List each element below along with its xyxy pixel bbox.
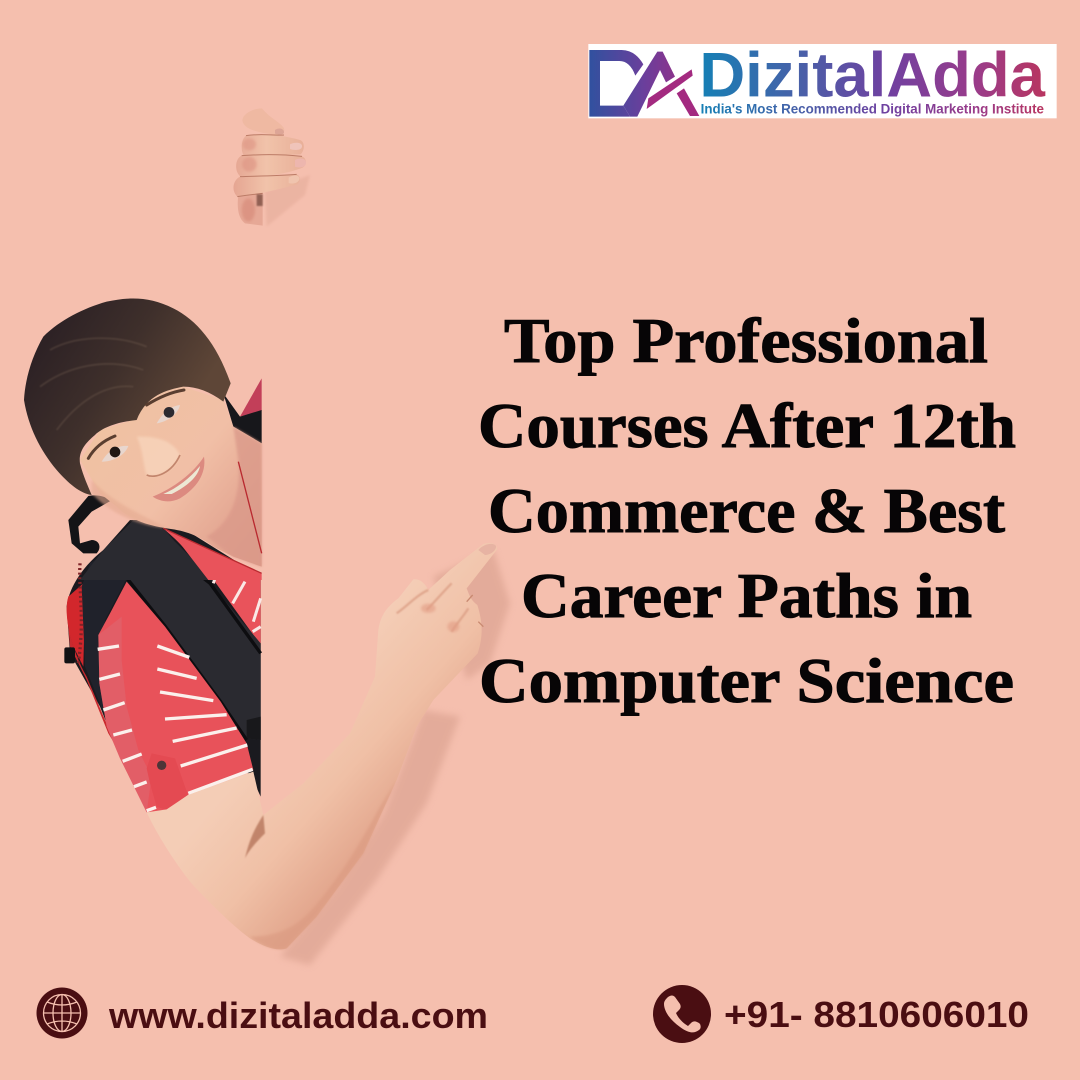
logo: DizitalAdda: DizitalAdda <box>699 41 1046 111</box>
head and neck <box>24 298 262 580</box>
icon: hand gripping panel edge <box>233 108 310 227</box>
sleeve <box>98 582 253 812</box>
shirt at collar <box>163 528 262 580</box>
hair <box>24 298 231 495</box>
title: Computer Science <box>479 645 1014 716</box>
title: Courses After 12th <box>478 390 1016 461</box>
sleeve cuff tab <box>147 753 188 810</box>
shoulder strap top <box>80 520 213 580</box>
backpack strap <box>105 522 261 740</box>
title <box>478 305 1016 716</box>
title: Career Paths in <box>521 560 972 631</box>
logo: DizitalAdda: India's Most Recommended Digital Marketing Institute <box>701 101 1044 117</box>
icon: phone <box>653 985 711 1043</box>
eyebrows <box>88 390 184 458</box>
arm and pointing hand <box>147 543 497 949</box>
neck cord <box>163 462 262 573</box>
website address: www.dizitaladda.com <box>108 995 488 1036</box>
eyes <box>102 446 128 462</box>
face and neck <box>80 387 262 567</box>
icon: globe <box>36 988 88 1038</box>
title: Top Professional <box>504 305 988 376</box>
nose <box>137 437 180 476</box>
phone number: +91- 8810606010 <box>724 994 1029 1035</box>
torso, sleeve and backpack <box>64 520 261 812</box>
backpack handle <box>68 495 111 553</box>
top shoulder patch <box>240 378 262 417</box>
logo: DizitalAdda <box>588 41 1057 118</box>
smile <box>153 457 204 501</box>
arm shadow <box>280 550 510 965</box>
person: student leaning from behind the panel <box>24 298 510 965</box>
t-shirt collar area <box>165 528 261 645</box>
title: Commerce & Best <box>488 475 1006 546</box>
